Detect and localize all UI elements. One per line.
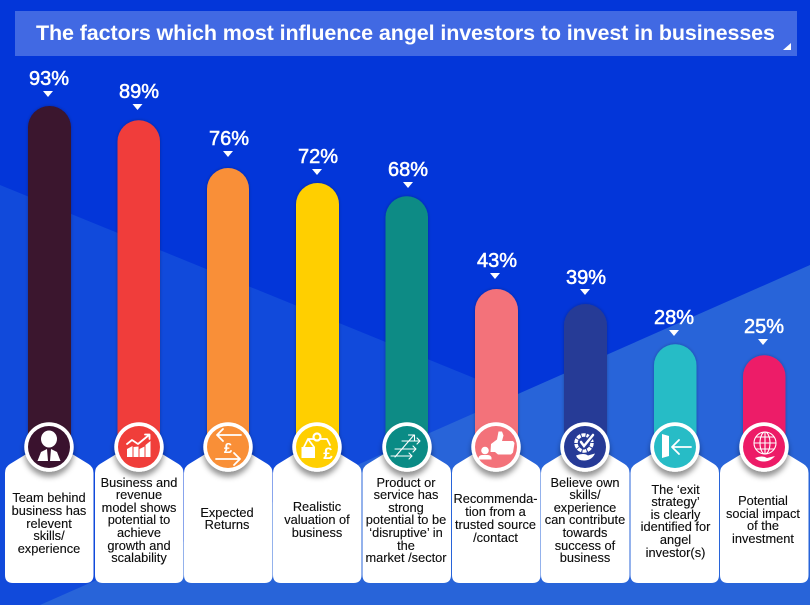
pointer: [43, 91, 53, 97]
description: Product or: [376, 475, 436, 490]
value label: 25%: [744, 316, 784, 338]
description: identified for: [641, 519, 711, 534]
description: growth and: [107, 538, 171, 553]
column: team 93%: [5, 68, 94, 583]
bar: [296, 183, 339, 470]
description: investment: [732, 531, 794, 546]
description: investor(s): [646, 545, 705, 560]
description: business has: [12, 503, 86, 518]
description: trusted source: [455, 517, 536, 532]
icon circle: scales: £: [323, 444, 333, 463]
description: /contact: [473, 530, 518, 545]
description: experience: [18, 541, 80, 556]
pointer: [669, 330, 679, 336]
description: social impact: [726, 506, 800, 521]
description: Recommenda-: [454, 491, 537, 506]
value label: 28%: [654, 307, 694, 329]
bar: [475, 289, 518, 470]
card: [184, 440, 272, 583]
description: market /sector: [365, 550, 447, 565]
icon circle: gear and check: [560, 422, 610, 472]
pointer: [403, 182, 413, 188]
column: disruptive product 68%: [362, 159, 451, 583]
column: own skills 39%: [541, 267, 630, 583]
description: skills/: [569, 487, 601, 502]
column: exit strategy 28%: [630, 307, 719, 583]
card: [95, 440, 184, 583]
bar: [118, 120, 160, 470]
description: The ‘exit: [651, 482, 700, 497]
card: [541, 440, 630, 583]
value label: 72%: [298, 146, 338, 168]
bar: [207, 168, 249, 470]
value label: 93%: [29, 68, 69, 90]
bar: [743, 355, 786, 470]
card: [362, 440, 451, 583]
description: valuation of: [284, 512, 350, 527]
value label: 43%: [477, 250, 517, 272]
description: Potential: [738, 493, 788, 508]
description: scalability: [111, 550, 167, 565]
value label: 39%: [566, 267, 606, 289]
pointer: [758, 339, 768, 345]
value label: 76%: [209, 128, 249, 150]
description: of the: [747, 518, 779, 533]
description: Believe own: [550, 475, 620, 490]
description: towards: [563, 525, 607, 540]
value label: 89%: [119, 81, 159, 103]
bar: [654, 344, 696, 470]
icon circle: exchange arrows: [203, 422, 253, 472]
bar: [386, 196, 428, 470]
column: recommendation 43%: [452, 250, 540, 583]
description: business: [560, 550, 610, 565]
icon circle: thumbs up: [471, 422, 521, 472]
title banner: [15, 11, 797, 56]
pointer: [223, 151, 233, 157]
title banner: The factors which most influence angel investors to invest in businesses: [36, 21, 775, 45]
icon circle: person: [24, 422, 74, 472]
description: the: [397, 538, 415, 553]
description: strong: [388, 500, 424, 515]
description: revenue: [116, 487, 162, 502]
pointer: [312, 169, 322, 175]
card: [630, 440, 719, 583]
description: tion from a: [465, 504, 527, 519]
description: achieve: [117, 525, 161, 540]
description: is clearly: [651, 507, 701, 522]
column: business model 89%: [95, 81, 184, 583]
description: model shows: [102, 500, 176, 515]
icon circle: exit door and arrow: [650, 422, 700, 472]
description: potential to: [108, 512, 170, 527]
column: social impact 25%: [720, 316, 808, 583]
column: expected returns 76%: [184, 128, 272, 583]
pointer: [580, 289, 590, 295]
description: angel: [660, 532, 691, 547]
description: Team behind: [12, 490, 86, 505]
description: Expected: [200, 505, 254, 520]
bar: [28, 106, 71, 470]
description: Returns: [205, 517, 249, 532]
description: potential to be: [366, 512, 446, 527]
icon circle: globe in hand: [739, 422, 789, 472]
description: Business and: [101, 475, 177, 490]
card: [5, 440, 94, 583]
icon circle: exchange arrows: £: [224, 440, 233, 457]
icon circle: scales: [292, 422, 342, 472]
description: success of: [555, 538, 616, 553]
icon circle: growth chart: [114, 422, 164, 472]
pointer: [132, 104, 142, 110]
description: can contribute: [545, 512, 625, 527]
pointer: [490, 273, 500, 279]
description: skills/: [33, 528, 65, 543]
description: Realistic: [293, 499, 342, 514]
description: strategy’: [651, 494, 700, 509]
card: [452, 440, 540, 583]
value label: 68%: [388, 159, 428, 181]
bar: [564, 304, 607, 470]
description: experience: [554, 500, 616, 515]
icon circle: disruptive arrows: [382, 422, 432, 472]
description: ‘disruptive’ in: [369, 525, 443, 540]
description: relevent: [26, 516, 72, 531]
description: service has: [374, 487, 438, 502]
card: [720, 440, 808, 583]
description: business: [292, 525, 342, 540]
column: realistic valuation 72%: [273, 146, 362, 583]
card: [273, 440, 362, 583]
